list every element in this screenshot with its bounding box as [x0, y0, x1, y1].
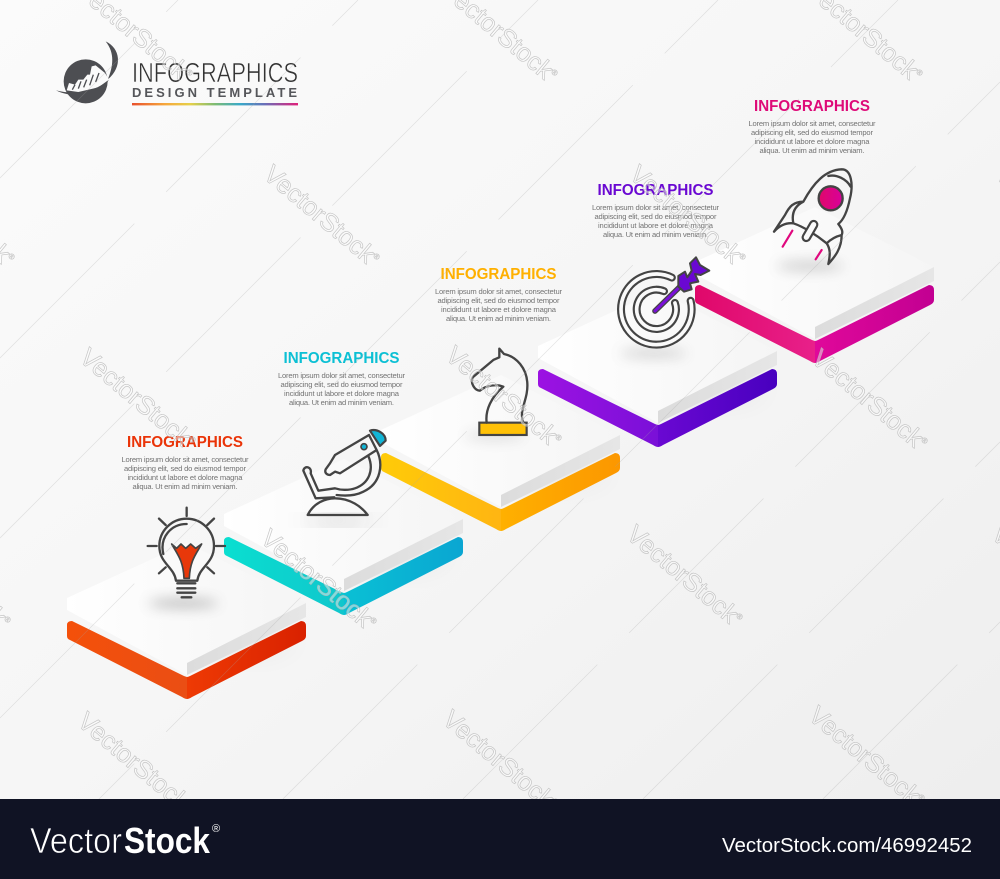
step 1 platform: red: [67, 543, 306, 699]
watermark text: VectorStock: [72, 707, 194, 816]
watermark text: VectorStock: [74, 343, 196, 452]
text block: step 3: aliqua. Ut enim ad minim veniam.: [446, 314, 551, 323]
text block: step 3: Lorem ipsum dolor sit amet, consectetur: [435, 287, 562, 296]
text block: step 3: [435, 266, 562, 323]
watermark text: VectorStock: [621, 520, 743, 629]
watermark text: ®: [187, 434, 198, 445]
text block: step 4: [592, 182, 719, 239]
logo icon: [56, 41, 118, 103]
watermark text: ®: [919, 435, 930, 446]
watermark text: ®: [916, 792, 927, 803]
text block: step 2: [278, 350, 405, 407]
text block: step 2: incididunt ut labore et dolore magna: [284, 389, 400, 398]
icon: target with arrow: [620, 257, 709, 357]
watermark text: VectorStock: [803, 701, 925, 810]
text block: step 4: adipiscing elit, sed do eiusmod tempor: [594, 212, 717, 221]
step 3 platform: yellow: [381, 375, 620, 531]
text block: step 5: Lorem ipsum dolor sit amet, consectetur: [748, 119, 876, 128]
watermark text: VectorStock: [255, 524, 377, 633]
icon: light bulb: [148, 508, 225, 607]
text block: step 5: [748, 98, 876, 155]
step 2 platform: cyan: [224, 459, 463, 615]
watermark text: ®: [368, 615, 379, 626]
step 5 platform: magenta: [695, 207, 934, 363]
text block: step 1: aliqua. Ut enim ad minim veniam.: [132, 482, 238, 491]
text block: step 1: Lorem ipsum dolor sit amet, consectetur: [122, 455, 249, 464]
watermark text: VectorStock: [258, 160, 380, 269]
text block: step 4: Lorem ipsum dolor sit amet, consectetur: [592, 203, 719, 212]
logo wordmark: INFOGRAPHICS: [132, 57, 298, 88]
footer bar: Vector: [30, 820, 122, 861]
watermark text: ®: [550, 796, 561, 807]
text block: step 4: aliqua. Ut enim ad minim veniam.: [603, 230, 708, 239]
text block: step 4: incididunt ut labore et dolore magna: [598, 221, 714, 230]
watermark text: ®: [914, 67, 925, 78]
watermark text: ®: [549, 67, 560, 78]
text block: step 3: adipiscing elit, sed do eiusmod tempor: [438, 296, 560, 305]
text block: step 1: INFOGRAPHICS: [127, 434, 243, 451]
watermark text: ®: [371, 251, 382, 262]
footer bar: Stock: [124, 820, 211, 861]
text block: step 5: incididunt ut labore et dolore magna: [754, 137, 870, 146]
watermark text: ®: [6, 251, 17, 262]
watermark text: VectorStock: [624, 160, 746, 269]
text block: step 1: incididunt ut labore et dolore magna: [128, 473, 243, 482]
watermark text: ®: [184, 67, 195, 78]
text block: step 5: INFOGRAPHICS: [754, 98, 870, 115]
watermark text: VectorStock: [437, 705, 559, 814]
text block: step 2: adipiscing elit, sed do eiusmod tempor: [280, 380, 403, 389]
text block: step 1: adipiscing elit, sed do eiusmod tempor: [124, 464, 246, 473]
logo wordmark: DESIGN TEMPLATE: [132, 85, 297, 100]
text block: step 2: aliqua. Ut enim ad minim veniam.: [289, 398, 394, 407]
watermark text: VectorStock: [806, 344, 928, 453]
text block: step 1: [122, 434, 249, 491]
footer bar: VectorStock.com/46992452: [722, 835, 972, 857]
text block: step 4: INFOGRAPHICS: [598, 182, 714, 199]
logo wordmark: [132, 57, 298, 105]
text block: step 5: adipiscing elit, sed do eiusmod tempor: [751, 128, 873, 137]
watermark text: ®: [2, 614, 13, 625]
icon: microscope: [303, 430, 386, 524]
text block: step 2: Lorem ipsum dolor sit amet, consectetur: [278, 371, 405, 380]
step 4 platform: purple: [538, 291, 777, 447]
watermark text: ®: [553, 432, 564, 443]
footer bar: [0, 799, 1000, 879]
text block: step 5: aliqua. Ut enim ad minim veniam.: [760, 146, 864, 155]
watermark text: ®: [734, 611, 745, 622]
watermark text: VectorStock: [440, 341, 562, 450]
text block: step 3: INFOGRAPHICS: [440, 266, 556, 283]
watermark text: ®: [185, 798, 196, 809]
footer bar: ®: [212, 823, 220, 835]
icon: chess knight: [465, 349, 527, 440]
icon: rocket: [774, 169, 852, 270]
watermark text: ®: [737, 251, 748, 262]
text block: step 2: INFOGRAPHICS: [284, 350, 400, 367]
text block: step 3: incididunt ut labore et dolore magna: [441, 305, 557, 314]
